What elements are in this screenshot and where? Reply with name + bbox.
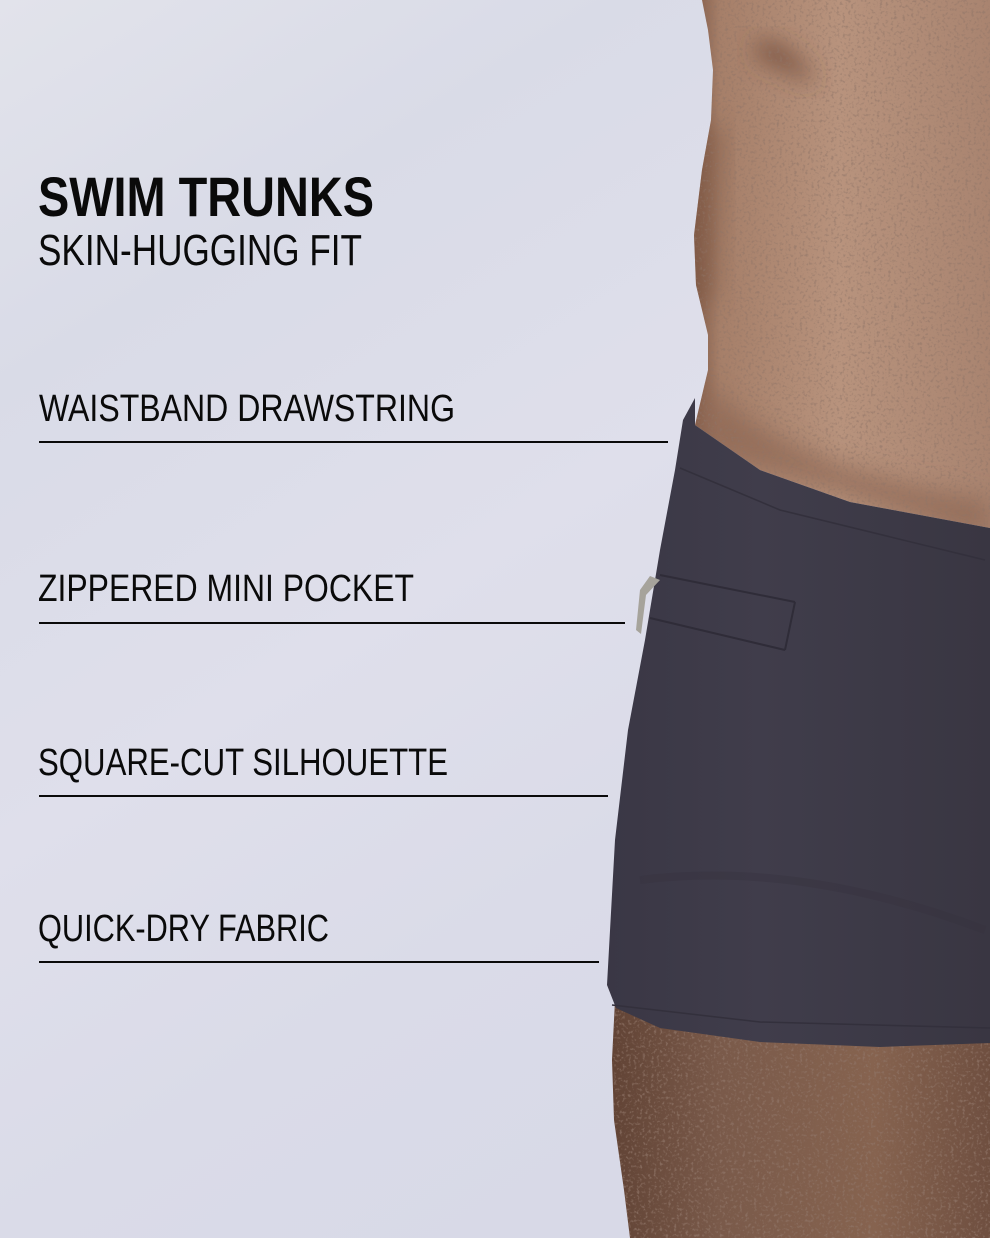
photo: model thigh (605, 1000, 990, 1238)
photo: swim trunks (607, 398, 990, 1047)
title: SWIM TRUNKS (38, 165, 374, 228)
feature: square-cut silhouette: SQUARE-CUT SILHOUETTE (38, 742, 448, 784)
subtitle: SKIN-HUGGING FIT (38, 226, 362, 275)
feature: quick-dry fabric: QUICK-DRY FABRIC (38, 908, 329, 950)
feature: zippered mini pocket: ZIPPERED MINI POCKET (38, 568, 414, 610)
icon: zipper pull (636, 576, 660, 634)
feature: waistband drawstring: WAISTBAND DRAWSTRING (39, 388, 455, 430)
photo: model torso (690, 0, 990, 540)
